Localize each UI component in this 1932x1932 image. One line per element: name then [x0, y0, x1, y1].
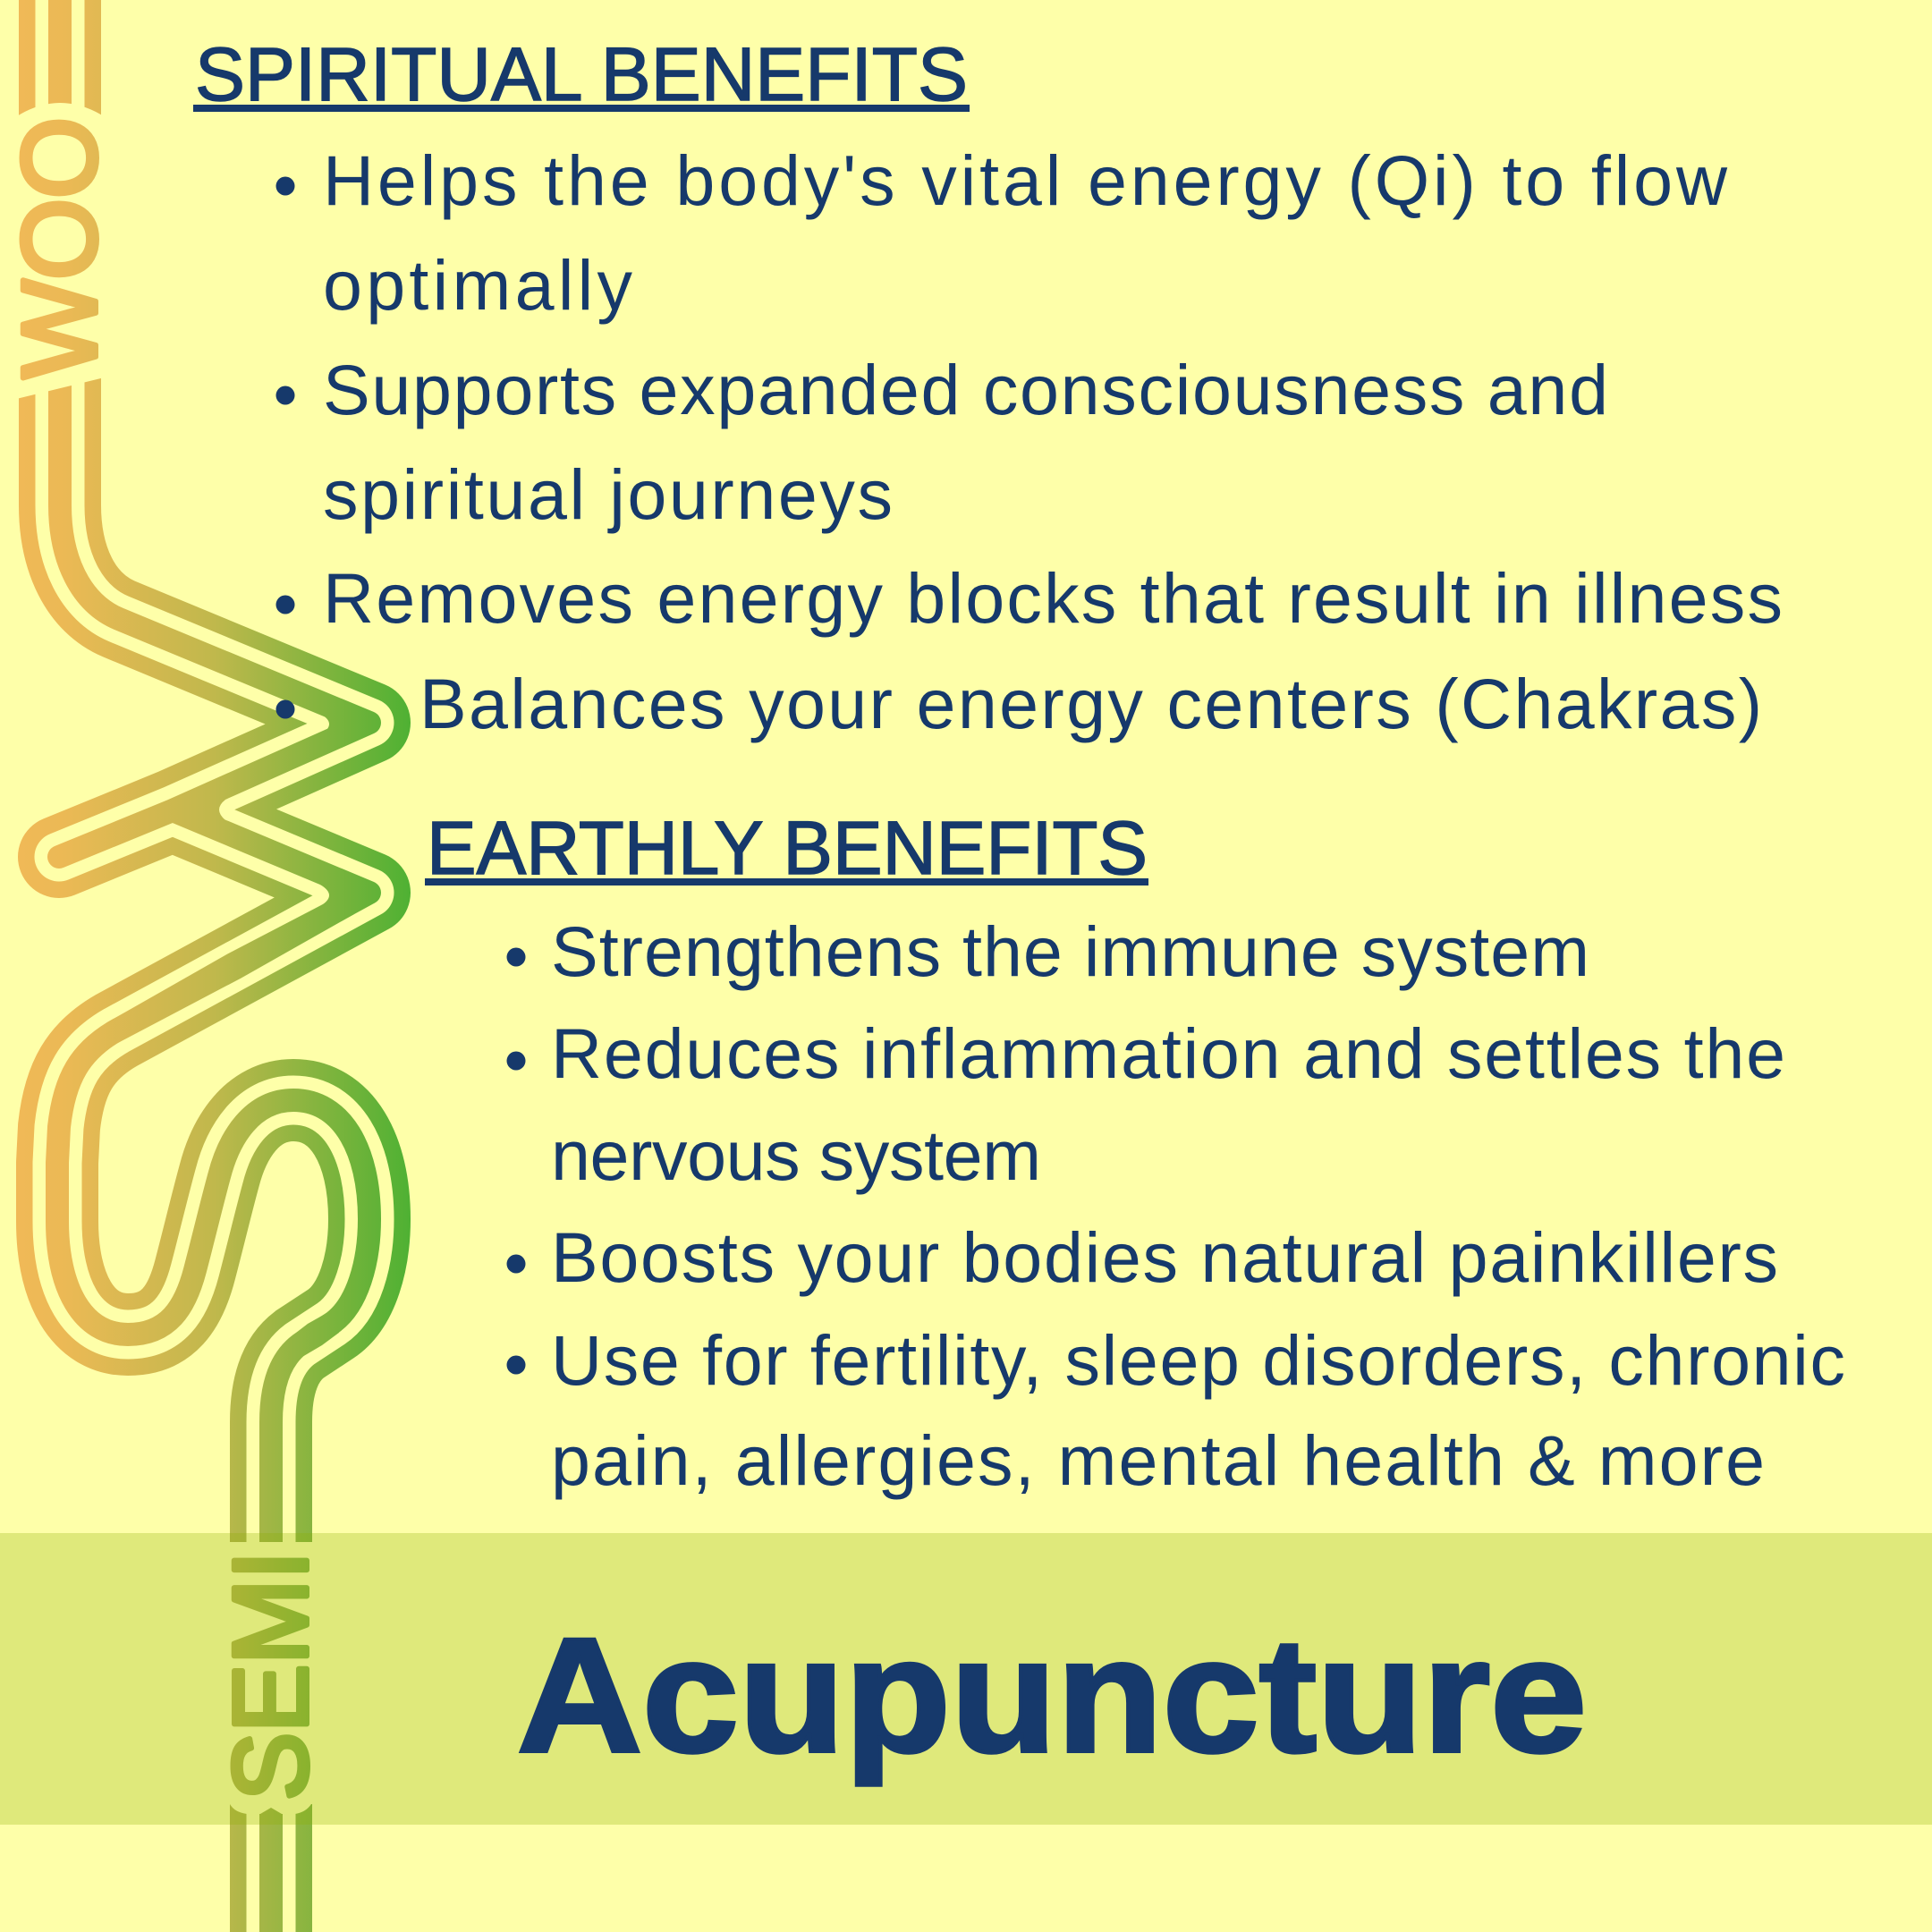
item: consciousness	[275, 350, 1608, 534]
item: qi	[275, 140, 1728, 325]
item: consciousness: spiritual journeys	[323, 454, 893, 534]
item: inflammation: Reduces inflammation and settles the	[551, 1013, 1785, 1093]
knockout behind WOO	[9, 103, 112, 401]
item: uses	[506, 1320, 1845, 1500]
title band	[0, 1533, 1932, 1825]
item: painkillers: Boosts your bodies natural painkillers	[551, 1217, 1778, 1297]
item: consciousness: Supports expanded consciousness and	[323, 350, 1608, 429]
list: spiritual benefits	[275, 140, 1783, 743]
item: immune: Strengthens the immune system	[551, 911, 1589, 991]
heading: spiritual benefits: SPIRITUAL BENEFITS	[195, 32, 968, 116]
item: qi: optimally	[323, 245, 633, 325]
heading: earthly benefits: EARTHLY BENEFITS	[427, 806, 1148, 890]
item: qi: Helps the body's vital energy (Qi) to flow	[323, 140, 1728, 220]
item: uses: pain, allergies, mental health & more	[551, 1420, 1765, 1500]
knockout behind SEMI	[224, 1542, 318, 1814]
item: energy blocks: Removes energy blocks that result in illness	[323, 558, 1783, 638]
item: inflammation: nervous system	[551, 1115, 1041, 1195]
label: WOO: WOO	[1, 117, 119, 378]
item: uses: Use for fertility, sleep disorders, chronic	[551, 1320, 1845, 1400]
item: inflammation	[506, 1013, 1785, 1195]
woo to semi energy path	[57, 0, 369, 1932]
label: SEMI: SEMI	[212, 1551, 330, 1801]
list: earthly benefits	[506, 911, 1845, 1500]
title: Acupuncture	[517, 1604, 1587, 1786]
item: chakras: Balances your energy centers (Chakras)	[419, 664, 1762, 743]
